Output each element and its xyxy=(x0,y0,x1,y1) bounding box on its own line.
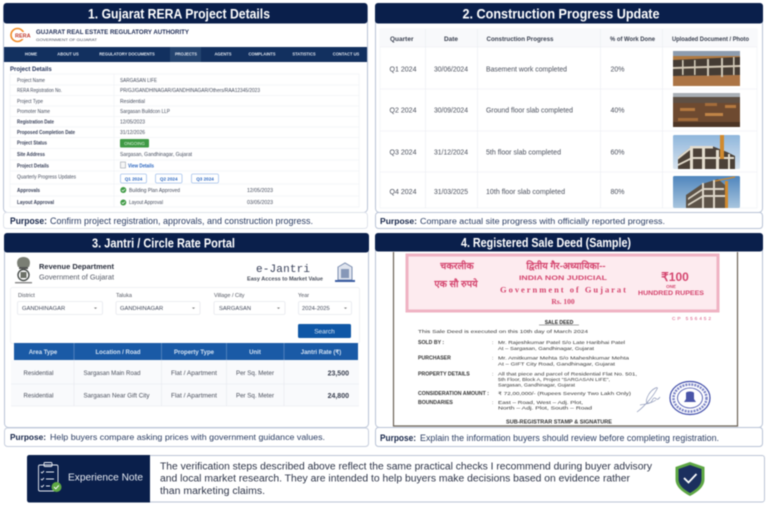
text: note body: than marketing claims. xyxy=(160,486,265,497)
icon: government building xyxy=(335,263,355,282)
stamp paper: Rs. 100 xyxy=(551,297,575,306)
deed details: At – GIFT City Road, Gandhinagar, Gujarat xyxy=(498,362,616,366)
table: project details: 12/05/2023 xyxy=(120,120,145,126)
table: progress: Q2 2024 xyxy=(390,108,417,114)
text: authority name xyxy=(36,29,190,42)
table: progress: 20% xyxy=(610,66,624,74)
icon: state emblem xyxy=(15,257,32,283)
approvals: 03/05/2023 xyxy=(247,200,273,206)
navigation bar xyxy=(4,47,367,62)
purpose: panel 3: Help buyers compare asking prices with government guidance values. xyxy=(50,432,325,442)
text: note body xyxy=(160,462,652,497)
table: progress: 40% xyxy=(610,108,624,114)
table: progress: 10th floor slab completed xyxy=(486,189,565,196)
table: project details: Project Type xyxy=(17,99,43,105)
deed details: : xyxy=(492,340,493,345)
deed details: Mr. Amitkumar Mehta S/o Maheshkumar Mehta xyxy=(498,356,630,360)
text: e-Jantri brand: Easy Access to Market Value xyxy=(247,276,323,282)
panel: Gujarat RERA project details xyxy=(4,3,368,212)
text: e-Jantri brand: e-Jantri xyxy=(256,264,310,276)
table: project details: PR/GJ/GANDHINAGAR/GANDHINAGAR/Others/RAA12345/2023 xyxy=(120,88,260,94)
panel: registered sale deed xyxy=(375,233,763,428)
purpose: panel 2 xyxy=(376,212,762,228)
document: sale deed: CP 556452 xyxy=(672,316,711,322)
stamp paper xyxy=(407,255,718,311)
heading: panel 2: 2. Construction Progress Update xyxy=(462,6,660,22)
navigation bar: CONTACT US xyxy=(333,52,360,56)
form: filters: 2024-2025 xyxy=(302,306,330,312)
deed details: SOLD BY : xyxy=(418,340,444,346)
quarterly buttons: Q2 2024 xyxy=(160,176,178,181)
document: sale deed: SUB-REGISTRAR STAMP & SIGNATURE xyxy=(506,420,613,426)
deed details: PROPERTY DETAILS xyxy=(418,372,470,378)
heading: project details: Project Details xyxy=(10,67,52,73)
purpose: panel 1: Confirm project registration, approvals, and construction progress. xyxy=(50,216,313,227)
text: note body: and local market research. They are intended to help buyers make decisions based on evidence rather xyxy=(160,474,631,484)
table: progress: Construction Progress xyxy=(486,37,554,43)
table: progress: 80% xyxy=(610,189,624,196)
navigation bar: STATISTICS xyxy=(292,52,316,56)
quarterly buttons: Q3 2024 xyxy=(196,176,214,181)
table: Jantri rates: Area Type xyxy=(29,350,58,356)
table: project details: Approvals xyxy=(17,188,40,194)
form: filters: Village / City xyxy=(214,293,245,299)
table: Jantri rates xyxy=(11,343,359,406)
approvals: Building Plan Approved xyxy=(129,188,180,194)
purpose: panel 1 xyxy=(4,212,368,228)
document: sale deed xyxy=(394,252,738,426)
stamp paper: INDIA NON JUDICIAL xyxy=(519,275,607,282)
form: filters: Taluka xyxy=(116,293,133,299)
table: Jantri rates: Flat / Apartment xyxy=(171,371,217,377)
table: Jantri rates: Sargasan Main Road xyxy=(84,371,140,377)
table: project details: Residential xyxy=(120,99,145,105)
purpose: panel 3: Purpose: xyxy=(10,432,46,442)
button: search: Search xyxy=(314,328,335,336)
status badge: ongoing: ONGOING xyxy=(124,141,146,146)
table: project details: Project Status xyxy=(17,141,47,147)
quarterly buttons: Q1 2024 xyxy=(125,176,143,181)
purpose: panel 4: Explain the information buyers should review before completing registration. xyxy=(420,433,719,443)
navigation bar: ABOUT US xyxy=(57,52,79,56)
table: Jantri rates: Jantri Rate (₹) xyxy=(301,349,341,356)
purpose: panel 3 xyxy=(4,428,368,446)
button: search xyxy=(298,324,351,338)
stamp paper: Government of Gujarat xyxy=(500,284,626,294)
table: project details: Quarterly Progress Updates xyxy=(17,175,76,181)
table: Jantri rates: Per Sq. Meter xyxy=(236,371,274,377)
table: progress: 30/06/2024 xyxy=(434,66,468,74)
link: view details: View Details xyxy=(128,164,154,170)
form: filters: Year xyxy=(298,293,309,299)
text: revenue department: Government of Gujarat xyxy=(39,274,114,282)
signature xyxy=(637,388,660,412)
deed details: ₹ 72,00,000/- (Rupees Seventy Two Lakh Only) xyxy=(498,391,632,396)
stamp paper: एक सौ रुपये xyxy=(433,278,478,290)
navigation bar: REGULATORY DOCUMENTS xyxy=(99,52,155,56)
navigation bar: PROJECTS xyxy=(175,52,197,56)
deed details: North – Adj. Plot, South – Road xyxy=(498,406,593,410)
navigation bar: AGENTS xyxy=(214,52,232,56)
table: Jantri rates: Property Type xyxy=(174,350,215,356)
icon: checklist clipboard xyxy=(38,462,62,492)
photo: Q2 site xyxy=(673,93,740,127)
text: authority name: GOVERNMENT OF GUJARAT xyxy=(36,37,98,42)
table: project details: Sargasan Buildcon LLP xyxy=(120,109,171,115)
form: filters xyxy=(10,288,360,344)
heading: panel 4: 4. Registered Sale Deed (Sample) xyxy=(461,235,631,250)
stamp paper: ONE xyxy=(666,284,676,289)
table: project details: Sargasan, Gandhinagar, Gujarat xyxy=(120,152,193,158)
deed details: 5th Floor, Block A, Project "SARGASAN LIFE", xyxy=(498,377,610,382)
table: project details: Project Details xyxy=(17,164,49,170)
table: Jantri rates: Sargasan Near Gift City xyxy=(84,394,150,400)
quarterly buttons xyxy=(120,174,218,183)
deed details: BOUNDARIES xyxy=(418,400,453,406)
table: progress: 31/12/2024 xyxy=(434,150,468,156)
icon: shield check xyxy=(676,462,704,496)
purpose: panel 1: Purpose: xyxy=(10,216,47,227)
table: progress: 31/03/2025 xyxy=(434,189,468,196)
table: project details: Site Address xyxy=(17,152,45,158)
table: project details xyxy=(10,74,359,207)
status badge: ongoing xyxy=(120,139,149,148)
table: progress: Q4 2024 xyxy=(390,189,417,196)
table: Jantri rates: 24,800 xyxy=(328,393,349,400)
purpose: panel 2: Purpose: xyxy=(380,217,417,226)
table: Jantri rates: Flat / Apartment xyxy=(171,394,217,400)
deed details: : xyxy=(492,356,493,360)
table: project details: Project Name xyxy=(17,78,45,84)
table: project details: RERA Registration No. xyxy=(17,88,62,94)
table: project details: Proposed Completion Date xyxy=(17,130,75,136)
deed details: Sargasan, Gandhinagar, Gujarat xyxy=(498,382,576,388)
text: revenue department: Revenue Department xyxy=(39,264,115,271)
approvals: Layout Approval xyxy=(129,200,163,206)
photo: Q3 building xyxy=(673,135,740,169)
deed details: CONSIDERATION AMOUNT : xyxy=(418,391,489,397)
icon: RERA logo: RERA xyxy=(15,34,31,40)
approvals xyxy=(120,187,273,206)
icon: RERA logo xyxy=(11,28,31,42)
text: revenue department xyxy=(39,264,115,282)
deed details: All that piece and parcel of Residential Flat No. 501, xyxy=(498,372,637,376)
deed details: : xyxy=(492,372,493,376)
deed details: At – Sargasan, Gandhinagar, Gujarat xyxy=(498,346,595,351)
navigation bar: COMPLAINTS xyxy=(248,52,276,56)
text: authority name: GUJARAT REAL ESTATE REGULATORY AUTHORITY xyxy=(36,29,190,36)
deed details: : xyxy=(492,400,493,405)
form: filters: GANDHINAGAR xyxy=(22,306,65,312)
document: sale deed: This Sale Deed is executed on this 10th day of March 2024 xyxy=(418,329,589,334)
table: progress: % of Work Done xyxy=(610,37,656,43)
table: progress: Basement work completed xyxy=(486,66,567,74)
text: e-Jantri brand xyxy=(247,264,323,282)
deed details xyxy=(418,340,637,410)
navigation bar: HOME xyxy=(25,52,37,56)
table: progress: 5th floor slab completed xyxy=(486,150,561,156)
heading: panel 3: 3. Jantri / Circle Rate Portal xyxy=(92,236,235,250)
table: progress: Ground floor slab completed xyxy=(486,108,573,114)
table: project details: Promoter Name xyxy=(17,109,50,115)
approvals: 12/05/2023 xyxy=(247,188,273,194)
form: filters: GANDHINAGAR xyxy=(120,306,163,312)
heading: panel 1: 1. Gujarat RERA Project Details xyxy=(88,6,270,22)
text: note body: The verification steps described above reflect the same practical checks I recommend during buyer advisory xyxy=(160,462,652,472)
stamp paper: द्वितीय गैर-अध्यायिका-- xyxy=(525,260,606,272)
stamp paper: HUNDRED RUPEES xyxy=(638,290,705,297)
table: Jantri rates: Residential xyxy=(24,371,54,377)
table: project details: SARGASAN LIFE xyxy=(120,78,158,84)
deed details: PURCHASER xyxy=(418,356,451,362)
table: progress: Q1 2024 xyxy=(390,66,417,74)
table: progress: 30/09/2024 xyxy=(434,108,468,114)
deed title: SALE DEED xyxy=(545,320,574,326)
table: project details: Registration Date xyxy=(17,120,54,126)
table: progress: Date xyxy=(444,37,459,43)
table: progress: Q3 2024 xyxy=(390,150,417,156)
form: filters: SARGASAN xyxy=(219,306,251,312)
table: Jantri rates: Per Sq. Meter xyxy=(236,394,274,400)
label: experience note: Experience Note xyxy=(68,472,143,484)
stamp paper: ₹100 xyxy=(661,270,689,284)
photo: Q1 site xyxy=(673,51,740,86)
table: progress xyxy=(380,29,757,208)
link: view details xyxy=(120,162,154,170)
purpose: panel 2: Compare actual site progress with officially reported progress. xyxy=(420,217,665,226)
panel: Jantri circle rate portal xyxy=(4,233,369,428)
table: Jantri rates: Unit xyxy=(249,350,261,356)
table: Jantri rates: Location / Road xyxy=(96,350,141,356)
table: progress: 60% xyxy=(610,150,624,156)
table: project details: Layout Approval xyxy=(17,200,55,206)
table: Jantri rates: 23,500 xyxy=(328,370,349,378)
deed details: East – Road, West – Adj. Plot, xyxy=(498,400,583,405)
photo: Q4 building xyxy=(673,176,740,208)
table: project details: 31/12/2026 xyxy=(120,130,145,136)
table: Jantri rates: Residential xyxy=(24,394,54,400)
panel: construction progress update xyxy=(375,3,763,212)
stamp paper: चकरलीक xyxy=(439,260,474,272)
purpose: panel 4 xyxy=(376,428,762,446)
purpose: panel 4: Purpose: xyxy=(380,433,416,443)
table: progress: Quarter xyxy=(390,37,414,43)
callout: experience note xyxy=(27,455,764,502)
table: progress: Uploaded Document / Photo xyxy=(672,37,749,43)
deed details: Mr. Rajeshkumar Patel S/o Late Haribhai Patel xyxy=(498,340,625,345)
form: filters: District xyxy=(18,293,35,299)
seal: sub-registrar xyxy=(670,382,710,414)
